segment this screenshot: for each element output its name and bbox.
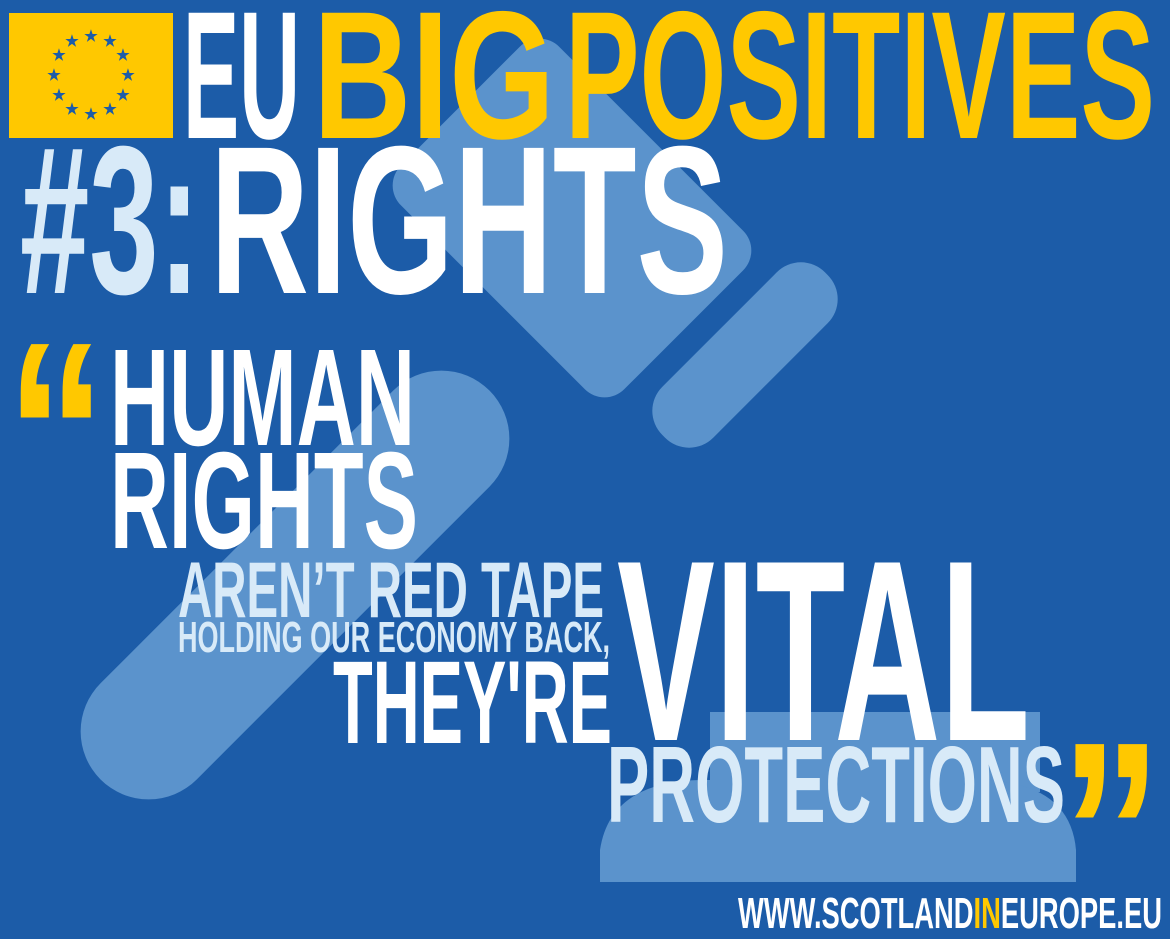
icon: EU flag: ★: [116, 87, 130, 104]
icon: EU flag: ★: [52, 47, 66, 64]
quote: RIGHTS: [110, 424, 418, 578]
subtitle: [20, 102, 728, 338]
icon: EU flag: ★: [116, 47, 130, 64]
icon: EU flag: ★: [65, 33, 79, 50]
subtitle: #3:: [20, 102, 200, 338]
icon: EU flag: ★: [103, 101, 117, 118]
icon: EU flag: [9, 13, 173, 138]
icon: EU flag: ★: [84, 106, 98, 123]
quote: HUMAN: [110, 321, 415, 475]
quote: [6, 289, 1162, 939]
quote: THEY'RE: [333, 637, 612, 769]
quote: AREN’T RED TAPE: [178, 545, 604, 634]
icon: EU flag: ★: [65, 101, 79, 118]
quote: HOLDING OUR ECONOMY BACK,: [178, 613, 610, 662]
title: [183, 0, 1155, 177]
icon: open quote: “: [6, 289, 106, 579]
icon: EU flag: ★: [52, 87, 66, 104]
icon: gavel: [52, 27, 1076, 882]
icon: EU flag: ★: [47, 67, 61, 84]
icon: EU flag: ★: [103, 33, 117, 50]
subtitle: RIGHTS: [210, 102, 728, 338]
icon: EU flag: ★: [84, 28, 98, 45]
icon: EU flag: ★: [121, 67, 135, 84]
